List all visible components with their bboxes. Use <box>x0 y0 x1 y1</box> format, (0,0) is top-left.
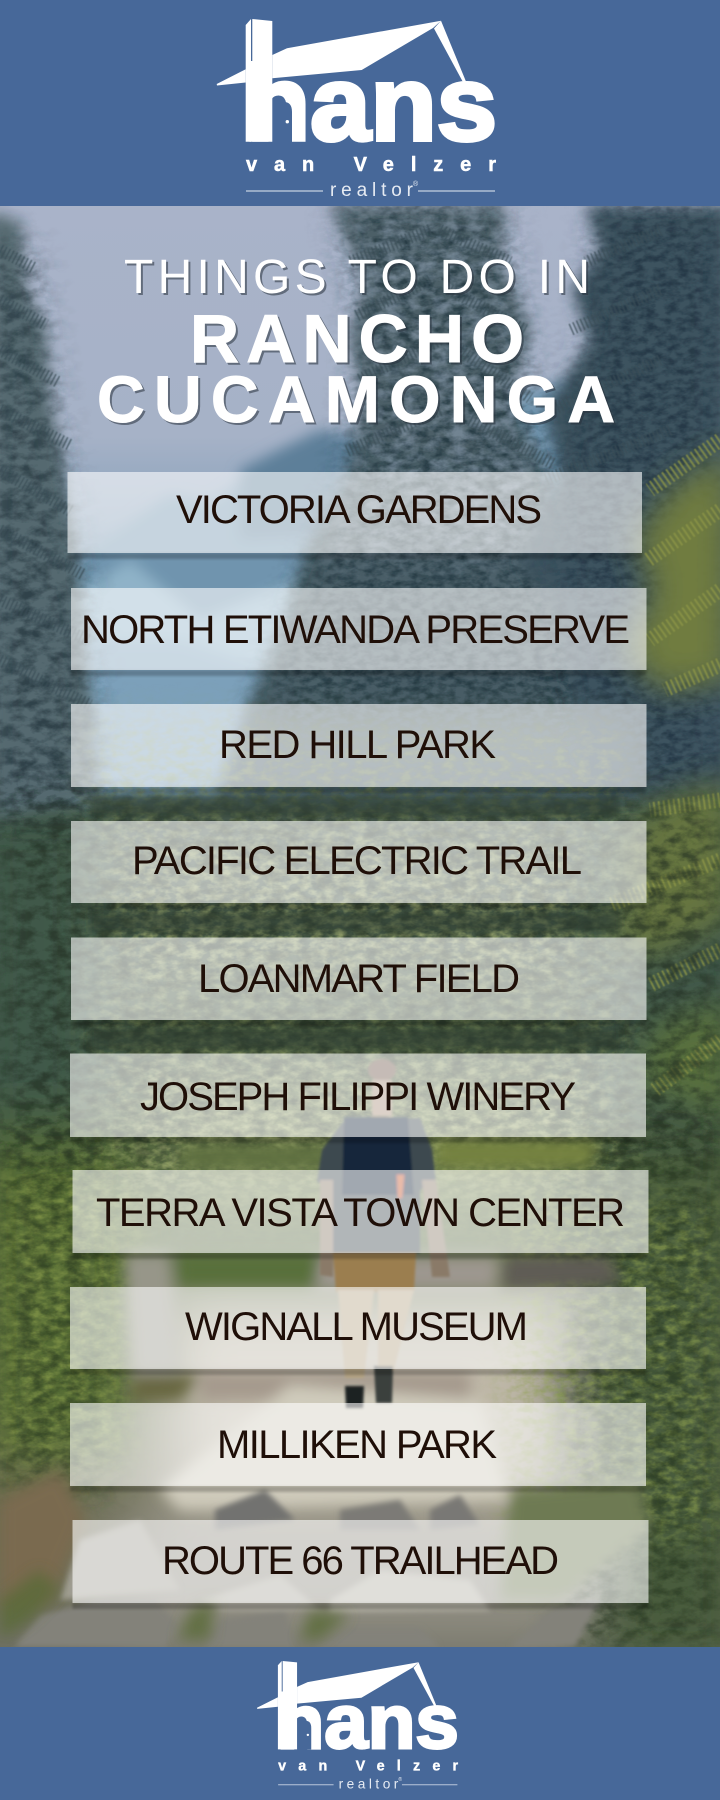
logo text: realtor (footer): ® <box>398 1776 402 1783</box>
logo wordmark: hans (footer): hans <box>277 1680 459 1765</box>
logo text: realtor (footer) <box>278 1776 457 1791</box>
title: Things to do in Rancho Cucamonga: THINGS TO DO IN <box>124 251 590 304</box>
list item: Route 66 Trailhead: ROUTE 66 TRAILHEAD <box>162 1539 559 1583</box>
list item: Victoria Gardens <box>68 472 642 559</box>
right yellow-green foliage <box>600 450 720 1120</box>
list item: Joseph Filippi Winery <box>70 1054 646 1143</box>
logo text: realtor: ® <box>413 180 419 188</box>
logo wordmark: hans: hans <box>244 45 497 163</box>
list item: Pacific Electric Trail <box>71 821 646 909</box>
rocks on trail <box>14 1490 600 1647</box>
list item: Joseph Filippi Winery: JOSEPH FILIPPI WINERY <box>140 1075 576 1119</box>
list item: Victoria Gardens: VICTORIA GARDENS <box>176 488 542 532</box>
distant mountains <box>60 372 610 800</box>
list item: Terra Vista Town Center: TERRA VISTA TOWN CENTER <box>96 1191 625 1235</box>
list item: Wignall Museum <box>70 1287 646 1375</box>
left conifer <box>0 212 100 820</box>
logo door: opening and knob (footer) <box>300 1721 311 1750</box>
list item: Pacific Electric Trail: PACIFIC ELECTRIC TRAIL <box>132 839 582 883</box>
list item: Milliken Park <box>70 1403 646 1492</box>
footer band <box>0 1647 720 1800</box>
mid forest texture <box>90 720 630 1220</box>
shrubs and ground <box>0 1170 720 1540</box>
list item: Wignall Museum: WIGNALL MUSEUM <box>185 1305 528 1349</box>
title: Things to do in Rancho Cucamonga <box>97 251 615 436</box>
right conifer <box>520 206 720 800</box>
list item: Red Hill Park <box>71 704 646 793</box>
list item: Terra Vista Town Center <box>72 1170 648 1259</box>
logo: header Hans van Velzer <box>217 19 497 201</box>
logo text: realtor (footer): realtor <box>339 1776 399 1791</box>
list item: Red Hill Park: RED HILL PARK <box>219 723 496 767</box>
list item: Loanmart Field: LOANMART FIELD <box>198 957 520 1001</box>
central conifer <box>215 206 630 800</box>
list item: Loanmart Field <box>71 938 646 1026</box>
dark gaps between panels <box>90 795 620 1050</box>
logo text: realtor <box>246 180 495 201</box>
list item: Route 66 Trailhead <box>72 1520 648 1609</box>
logo text: van Velzer: van Velzer <box>246 154 496 176</box>
title: Things to do in Rancho Cucamonga: RANCHO <box>190 301 524 377</box>
logo text: realtor: realtor <box>330 180 414 201</box>
list item: North Etiwanda Preserve: NORTH ETIWANDA PRESERVE <box>81 608 630 652</box>
hiker <box>317 1059 450 1408</box>
conifer branches <box>0 230 670 705</box>
title: Things to do in Rancho Cucamonga: CUCAMONGA <box>97 362 615 436</box>
list item: North Etiwanda Preserve <box>71 588 646 676</box>
list item: Milliken Park: MILLIKEN PARK <box>217 1423 497 1467</box>
logo door: opening and knob <box>276 102 292 142</box>
icon: house roof and chimney <box>217 19 467 142</box>
icon: house roof and chimney (footer) <box>257 1661 437 1749</box>
header band <box>0 0 720 206</box>
yellow-green fronds <box>610 440 720 1090</box>
logo: footer Hans van Velzer <box>257 1661 459 1791</box>
logo text: van Velzer (footer): van Velzer <box>278 1758 459 1774</box>
